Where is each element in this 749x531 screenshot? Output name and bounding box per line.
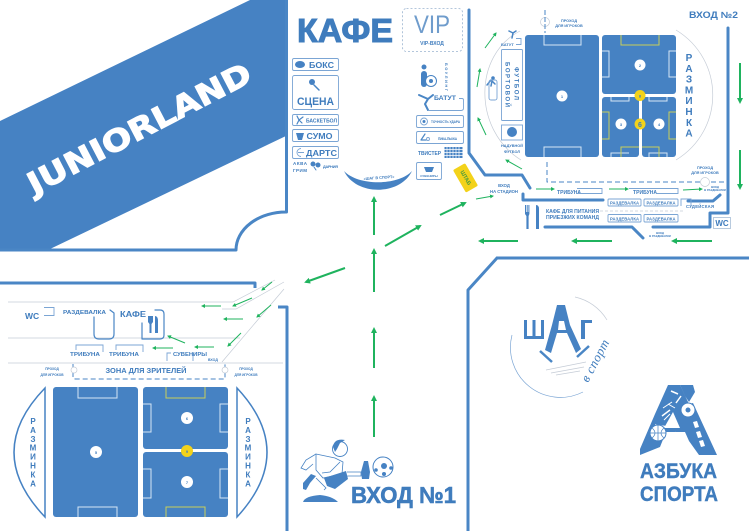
card: sumo xyxy=(292,130,338,142)
labels: stands lower-left xyxy=(70,345,143,358)
arrows: green thin top right xyxy=(476,33,702,199)
labels: stands: ТРИБУНА xyxy=(633,190,657,196)
card: stage: СЦЕНА xyxy=(297,96,334,108)
heading: entrance 2: ВХОД №2 xyxy=(689,10,738,20)
icon: runner with card xyxy=(487,76,497,100)
card: WC top right: WC xyxy=(715,219,729,228)
badge: headquarters: ШТАБ xyxy=(458,170,472,187)
illustration: football player xyxy=(301,440,393,502)
field 6 xyxy=(143,387,228,449)
warm-up: top right: И xyxy=(685,96,693,107)
warm-up: left: М xyxy=(30,444,37,453)
label: aqua grim and darts xyxy=(293,161,338,173)
card: shot accuracy: ТОЧНОСТЬ УДАРА xyxy=(431,120,461,124)
card: board football: БОРТОВОЙ xyxy=(504,62,512,107)
card: basketball xyxy=(292,114,338,126)
label: souvenirs xyxy=(167,352,218,362)
text: cafe for teams: ПРИЕЗЖИХ КОМАНД xyxy=(546,215,599,221)
label: player passage right xyxy=(691,166,726,192)
card: basketball: БАСКЕТБОЛ xyxy=(306,118,337,124)
crescent: Step into sport xyxy=(344,171,412,190)
card: box: БОКС xyxy=(309,60,334,70)
label: player passage right: ПРОХОД xyxy=(697,166,713,170)
text: cafe for teams xyxy=(546,209,599,221)
label: cafe with cutlery xyxy=(120,310,164,339)
card: board football xyxy=(502,50,522,120)
field 5: 5 xyxy=(95,450,98,455)
warm-up: top right: М xyxy=(685,85,693,96)
walls: lower-left zone xyxy=(0,283,287,531)
label: cafe with cutlery: КАФЕ xyxy=(120,310,147,319)
warm-up: left xyxy=(14,388,45,517)
title: JUNIORLAND: JUNIORLAND xyxy=(20,57,258,203)
heading: cafe: КАФЕ xyxy=(297,12,393,49)
arrows: green thick route xyxy=(306,63,740,437)
label: referee room: СУДЕЙСКАЯ xyxy=(686,204,714,209)
dashed path: spectator zone xyxy=(73,364,225,379)
logo: Step into sport xyxy=(510,297,612,397)
card: board football: ФУТБОЛ xyxy=(512,67,518,100)
label: locker room with bracket: РАЗДЕВАЛКА xyxy=(63,310,106,316)
warm-up: right: А xyxy=(245,426,251,435)
warm-up: left: Р xyxy=(30,417,36,426)
card: sumo: СУМО xyxy=(306,131,333,141)
banner: Juniorland xyxy=(0,0,288,250)
cards: locker rooms: РАЗДЕВАЛКА xyxy=(646,200,676,206)
card: WC top right xyxy=(714,218,730,228)
yellow marker 8 xyxy=(634,90,646,101)
warm-up: right: Р xyxy=(245,417,251,426)
warm-up: right: З xyxy=(245,435,251,444)
card: darts xyxy=(292,146,338,158)
card: box xyxy=(292,58,338,70)
icon and label: trampoline xyxy=(419,95,464,110)
logo: sports alphabet: АЗБУКА xyxy=(640,460,717,483)
icon: bowling and ball: БОУЛИНГ xyxy=(444,63,448,92)
warm-up: left: Н xyxy=(30,462,36,470)
label: referee room xyxy=(681,199,714,209)
warm-up: top right: З xyxy=(686,75,692,86)
label: locker entrance: В РАЗДЕВАЛКИ xyxy=(649,234,671,238)
label: player passage top: ПРОХОД xyxy=(561,19,577,23)
field 1: 1 xyxy=(561,94,564,99)
text: cafe for teams: КАФЕ ДЛЯ ПИТАНИЯ xyxy=(546,209,599,215)
label: stadium entrance: НА СТАДИОН xyxy=(490,189,518,194)
warm-up: top right: Н xyxy=(685,107,693,118)
card: bubble football xyxy=(501,125,523,154)
field 4 xyxy=(642,97,676,157)
VIP entrance box xyxy=(402,8,462,52)
warm-up: left: А xyxy=(30,479,36,488)
warm-up: left: З xyxy=(30,435,36,444)
warm-up: top right: А xyxy=(685,129,693,140)
label: locker entrance: ВХОД xyxy=(656,231,664,235)
labels: stands: ТРИБУНА xyxy=(557,190,581,196)
cards: locker rooms: РАЗДЕВАЛКА xyxy=(610,216,639,222)
label: stadium entrance xyxy=(490,183,518,194)
warm-up: right: К xyxy=(246,470,251,479)
card: stage xyxy=(292,76,338,110)
logo: Step into sport: в спорт xyxy=(577,337,612,384)
label: player passage right: ВХОД xyxy=(711,185,719,189)
label: locker entrance xyxy=(649,231,671,238)
cards: locker rooms: РАЗДЕВАЛКА xyxy=(646,216,676,222)
card: souvenirs: СУВЕНИРЫ xyxy=(420,174,438,178)
label: souvenirs: СУВЕНИРЫ xyxy=(173,352,208,358)
warm-up: top right xyxy=(485,30,713,160)
warm-up: top right: А xyxy=(685,64,693,75)
logo: sports alphabet xyxy=(640,385,718,506)
label: WC: WC xyxy=(25,311,39,321)
labels: stands lower-left: ТРИБУНА xyxy=(70,352,100,358)
VIP entrance box: VIP xyxy=(414,11,450,39)
label: souvenirs: ВХОД xyxy=(208,358,218,362)
label: spectator zone: ЗОНА ДЛЯ ЗРИТЕЛЕЙ xyxy=(106,366,186,375)
warm-up: top right: Р xyxy=(686,53,693,64)
warm-up: left: И xyxy=(30,453,36,462)
label: aqua grim and darts: ДАРНИЯ xyxy=(323,165,338,169)
yellow marker 9: 9 xyxy=(186,449,189,454)
field 4: 4 xyxy=(658,122,661,127)
card: shot accuracy xyxy=(416,116,464,128)
warm-up: right: М xyxy=(245,444,252,453)
label: player passage right: ДЛЯ ИГРОКОВ xyxy=(691,171,719,175)
warm-up: left: А xyxy=(30,426,36,435)
yellow marker 6 xyxy=(634,118,646,130)
labels: stands xyxy=(557,188,678,196)
walls: top-right zone xyxy=(468,10,749,531)
label: stadium entrance: ВХОД xyxy=(498,183,510,188)
cards: locker rooms xyxy=(600,199,685,222)
badge: headquarters xyxy=(453,163,478,193)
card: ball kick: ПИКА-ПЫЖА xyxy=(438,137,458,141)
labels: player passages lower-left xyxy=(40,367,258,377)
field 1 xyxy=(525,35,599,157)
yellow marker 6: 6 xyxy=(638,122,642,129)
icon: fork and knife xyxy=(525,205,539,229)
cards: locker rooms: РАЗДЕВАЛКА xyxy=(610,200,639,206)
field 2 top: 2 xyxy=(639,63,642,68)
label: player passage right: В РАЗДЕВАЛКИ xyxy=(704,188,726,192)
corridor lines lower-left xyxy=(8,280,284,363)
warm-up: left: К xyxy=(31,470,36,479)
labels: player passages lower-left: ПРОХОД xyxy=(45,367,59,371)
card: darts: ДАРТС xyxy=(306,148,337,158)
field 7 xyxy=(143,452,228,517)
crescent: Step into sport: «ШАГ В СПОРТ» xyxy=(363,175,395,181)
warm-up: right: Н xyxy=(245,462,251,470)
field 7: 7 xyxy=(186,480,189,485)
warm-up: right xyxy=(237,388,267,517)
card: souvenirs xyxy=(416,162,442,180)
field 2 top xyxy=(602,35,676,94)
warm-up: right: И xyxy=(245,453,251,462)
label: WC xyxy=(25,308,54,321)
icon and label: trampoline: БАТУТ xyxy=(434,95,456,102)
arrows: lower-left xyxy=(153,282,272,348)
dashed path: players route xyxy=(547,162,725,182)
warm-up: top right: К xyxy=(686,118,693,129)
icon: bowling and ball xyxy=(421,63,448,92)
labels: player passages lower-left: ПРОХОД xyxy=(239,367,253,371)
warm-up: right: А xyxy=(245,479,251,488)
field 3: 3 xyxy=(620,122,623,127)
VIP entrance box: VIP-ВХОД xyxy=(420,41,444,47)
label and grid: twister: ТВИСТЕР xyxy=(418,151,442,157)
yellow marker 9 xyxy=(181,445,193,457)
field 3 xyxy=(602,97,639,157)
label: locker room with bracket xyxy=(63,310,114,339)
yellow marker 8: 8 xyxy=(639,94,642,98)
logo: sports alphabet: СПОРТА xyxy=(640,483,718,506)
labels: player passages lower-left: ДЛЯ ИГРОКОВ xyxy=(40,373,64,377)
heading: entrance 1: ВХОД №1 xyxy=(351,482,456,508)
label and grid: twister xyxy=(418,147,463,158)
icon and label: trampoline small: БАТУТ xyxy=(501,42,514,47)
labels: stands lower-left: ТРИБУНА xyxy=(109,352,139,358)
card: ball kick xyxy=(416,132,464,144)
label: player passage top: ДЛЯ ИГРОКОВ xyxy=(555,24,583,28)
icon and label: trampoline small xyxy=(501,31,521,47)
field 6: 6 xyxy=(186,416,189,421)
label: aqua grim and darts: ГРИМ xyxy=(293,168,307,173)
label: player passage top xyxy=(540,10,583,33)
field 5 xyxy=(53,387,138,517)
card: bubble football: ФУТБОЛ xyxy=(504,150,520,154)
label: aqua grim and darts: АКВА xyxy=(293,161,308,166)
card: bubble football: НАДУВНОЙ xyxy=(501,144,523,148)
labels: player passages lower-left: ДЛЯ ИГРОКОВ xyxy=(234,373,258,377)
